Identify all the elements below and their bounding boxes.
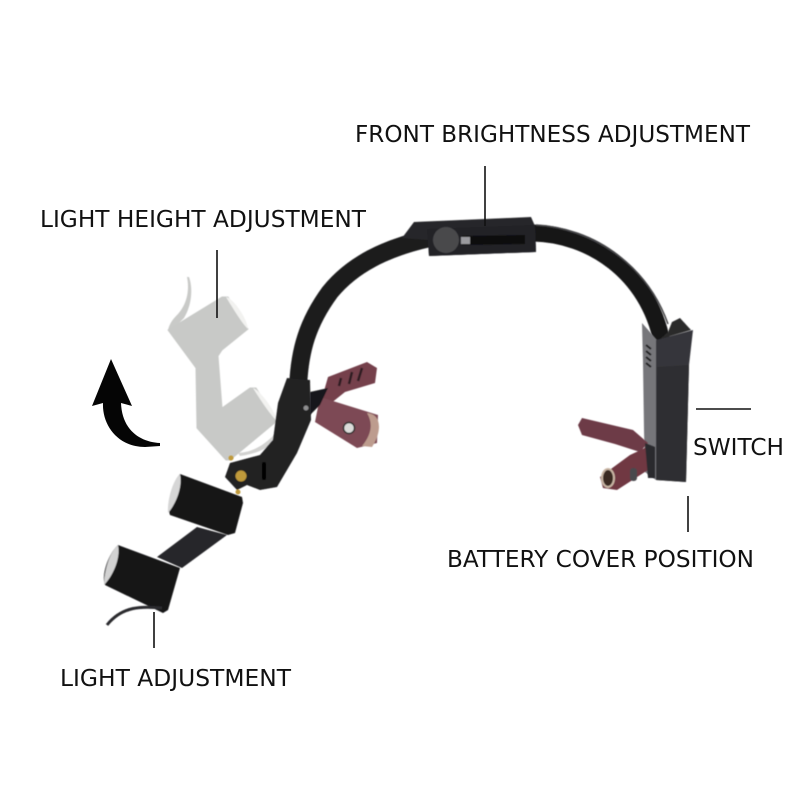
leader lines	[154, 166, 751, 648]
battery front cover	[656, 330, 693, 482]
headband	[225, 217, 668, 494]
lower light barrel	[104, 545, 180, 613]
label: switch: SWITCH	[693, 435, 784, 461]
connector bridge	[157, 527, 227, 568]
battery side panel	[642, 323, 657, 480]
right loupe clip, maroon	[578, 418, 655, 490]
upper light barrel	[169, 474, 243, 535]
leader: light adjustment	[153, 612, 155, 648]
left loupe clip, maroon	[310, 362, 379, 448]
battery module	[642, 318, 693, 482]
lower black light pair	[104, 474, 243, 625]
label: light adjustment: LIGHT ADJUSTMENT	[60, 666, 292, 692]
right band arm	[533, 233, 662, 342]
curved up arrow	[92, 359, 160, 447]
leader: switch	[696, 408, 751, 410]
label: battery cover position: BATTERY COVER POSITION	[447, 547, 754, 573]
leader: battery cover	[687, 496, 689, 532]
left band arm	[298, 238, 430, 390]
ghost raised light, grey	[168, 277, 277, 460]
left pivot arm	[225, 378, 311, 490]
cable	[107, 607, 162, 625]
control box with brightness slider	[402, 217, 536, 256]
label: front brightness adjustment: FRONT BRIGHTNESS ADJUSTMENT	[355, 122, 751, 148]
leader: front brightness	[484, 166, 486, 226]
label: light height adjustment: LIGHT HEIGHT ADJUSTMENT	[40, 207, 367, 233]
leader: light height	[216, 250, 218, 318]
